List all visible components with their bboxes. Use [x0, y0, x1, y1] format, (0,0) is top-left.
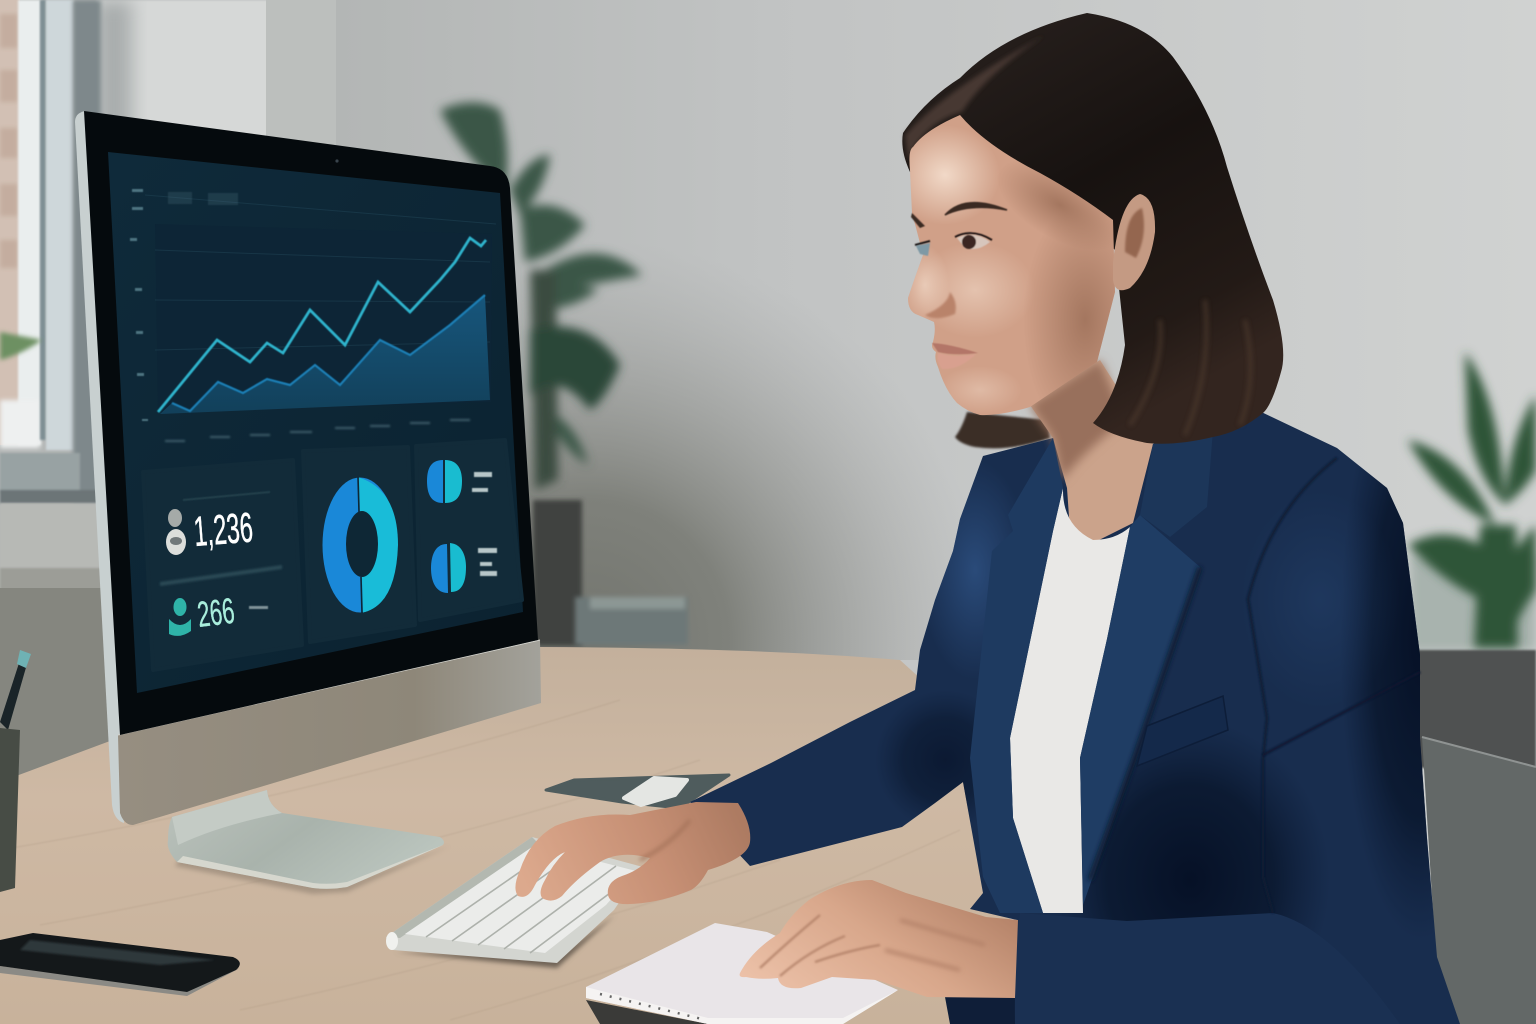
office chair: [1422, 737, 1536, 1024]
back hair under chin: [955, 412, 1050, 448]
x axis labels: [165, 419, 470, 442]
small caption: [249, 606, 268, 609]
silver edge: [75, 111, 124, 823]
chart area fill: [160, 295, 490, 414]
eyes: [915, 233, 992, 256]
shadow: [395, 915, 615, 968]
keyboard: [386, 837, 643, 968]
faint grid: [145, 195, 496, 350]
window and sill: [0, 0, 336, 660]
side rail: [386, 837, 538, 938]
chin: [118, 640, 541, 825]
jacket: [690, 412, 1460, 1024]
upper cheek light: [934, 252, 1022, 328]
lower frame: [0, 453, 80, 493]
teal line: [158, 238, 486, 412]
donut panel: [303, 447, 415, 642]
chin light: [950, 373, 1010, 408]
wall shadow near desk: [180, 230, 1000, 660]
hair strand highlights: [1130, 300, 1250, 435]
roller: [386, 932, 398, 950]
mouse pad: [546, 775, 729, 807]
lips: [932, 343, 978, 369]
inner frame: [40, 0, 46, 440]
window recess wall: [96, 0, 268, 510]
pen: [0, 660, 27, 730]
stat value: 266: [195, 590, 237, 635]
window sill: [0, 503, 100, 569]
mini chart bottom: [431, 543, 466, 593]
hair silhouette: [902, 13, 1283, 444]
outer frame: [73, 0, 101, 505]
hand on keyboard: [515, 802, 750, 904]
back shadow: [1352, 470, 1432, 902]
blurred mini labels: [472, 472, 497, 576]
axis ticks: [130, 189, 238, 421]
forehead highlight: [910, 132, 993, 218]
skirting box: [575, 597, 688, 645]
nose light: [908, 254, 943, 318]
person: [515, 13, 1500, 1024]
faint dividers: [183, 491, 270, 501]
shirt: [1010, 488, 1130, 913]
sleeve fold: [1263, 672, 1420, 755]
notebook: [586, 923, 898, 1024]
monitor: [75, 111, 541, 825]
brick outside: [0, 0, 20, 445]
body lower left piece: [945, 997, 1016, 1024]
finger gaps: [760, 915, 880, 976]
hair part highlight: [905, 35, 1045, 160]
chart background: [155, 224, 492, 412]
pocket: [1137, 696, 1228, 766]
desk shadow under stand: [175, 846, 450, 894]
jacket shading: [889, 470, 1432, 924]
mini chart top: [427, 460, 462, 503]
sleeve seam: [1248, 458, 1337, 913]
mouse: [624, 778, 687, 805]
lit shoulder: [934, 481, 1013, 660]
cup: [0, 728, 20, 892]
stat panel: [143, 460, 302, 670]
wood grain: [0, 700, 960, 1020]
donut chart: [322, 477, 398, 613]
key field: [405, 845, 636, 953]
right collar: [1140, 430, 1213, 537]
outside foliage: [0, 332, 42, 360]
window glass: [18, 0, 41, 445]
face: [908, 115, 1115, 416]
left lapel: [970, 438, 1063, 913]
under arm shadow: [889, 704, 975, 814]
neck shadow: [1030, 360, 1125, 480]
sleeve light: [1284, 549, 1372, 652]
ear: [1113, 194, 1155, 290]
stat value: 1,236: [192, 503, 255, 555]
camera: [335, 159, 339, 163]
blue line: [172, 295, 485, 411]
lower left wall: [0, 588, 118, 785]
tendon shading: [885, 920, 985, 970]
chest shadow: [1074, 743, 1310, 924]
user icon: [166, 509, 186, 555]
hand on notebook: [740, 880, 1018, 998]
screen: [108, 152, 523, 693]
nose shadow: [925, 292, 956, 318]
plant pot right: [1416, 650, 1536, 768]
plant pot behind monitor: [533, 500, 582, 646]
plant right: [1408, 352, 1536, 651]
phone: [0, 933, 240, 996]
eyebrows: [911, 203, 1007, 228]
mini charts panel: [416, 440, 522, 620]
jaw shadow: [1034, 232, 1115, 392]
hairline shadow: [1009, 168, 1110, 239]
pale backing: [1410, 555, 1536, 651]
neck: [1030, 360, 1153, 543]
sleeve cuff: [1015, 913, 1400, 1024]
knuckle shading: [640, 820, 690, 860]
desk: [0, 647, 1010, 1024]
hair: [902, 13, 1283, 444]
lapel shadow edge: [1090, 567, 1200, 880]
teal user icon: [169, 598, 191, 636]
plant behind monitor: [440, 102, 642, 490]
line chart panel: [130, 189, 496, 442]
black bezel: [84, 111, 538, 735]
monitor stand: [168, 790, 444, 889]
right lapel: [1080, 515, 1200, 905]
pen holder: [0, 650, 31, 892]
